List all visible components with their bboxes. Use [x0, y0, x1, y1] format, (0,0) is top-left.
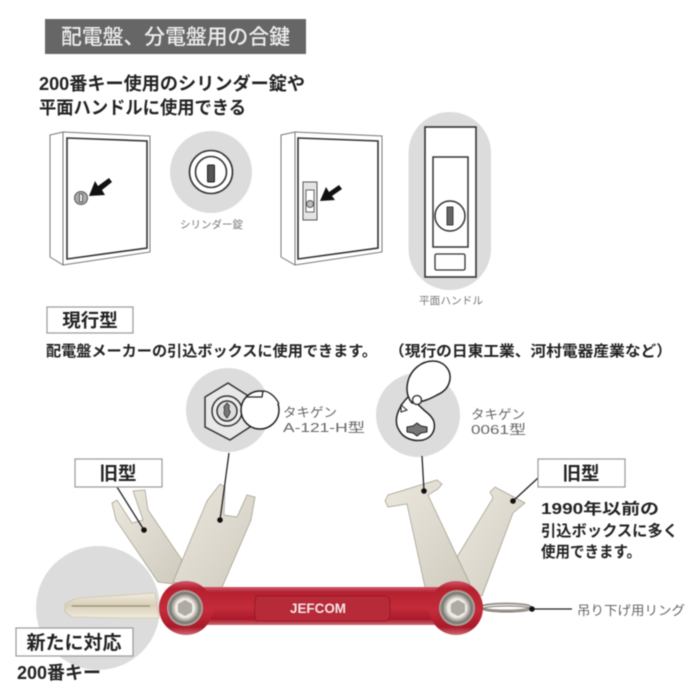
leader lines and dots	[117, 453, 572, 612]
text: usage for current type: 配電盤メーカーの引込ボックスに使用できます。	[46, 342, 377, 360]
label: cylinder lock: シリンダー錠	[180, 218, 243, 231]
label: flat handle: 平面ハンドル	[419, 295, 483, 307]
label: 200 key: 200番キー	[17, 663, 101, 683]
200 key	[65, 593, 159, 618]
heading: usable locks	[39, 73, 305, 118]
illustration: cabinet with flat handle	[281, 132, 382, 265]
tag: old type right	[538, 459, 625, 487]
text: usage for current type	[46, 342, 672, 360]
tag: old type right: 旧型	[562, 463, 600, 484]
text: old type description: 使用できます。	[541, 543, 641, 561]
label: Takigen A-121-H: タキゲン	[283, 405, 337, 420]
tool blade: A-121-H	[173, 484, 255, 592]
text: usage for current type: （現行の日東工業、河村電器産業など）	[389, 342, 672, 360]
icon: A-121-H lock	[186, 368, 279, 452]
red aluminium handle	[159, 581, 483, 635]
tag: current type	[47, 307, 133, 333]
tool blade: old type left	[112, 490, 182, 584]
text: old type description	[541, 499, 678, 561]
illustration: cabinet with cylinder lock	[50, 132, 150, 265]
tag: newly supported: 新たに対応	[26, 632, 122, 654]
tool blade: old type right	[457, 487, 525, 596]
tool blade: 0061	[385, 480, 470, 592]
brand name: JEFCOM	[290, 600, 346, 616]
label: Takigen 0061: タキゲン	[471, 407, 525, 422]
tag: current type: 現行型	[62, 310, 118, 331]
heading: usable locks: 200番キー使用のシリンダー錠や	[39, 73, 305, 94]
title banner: 配電盤、分電盤用の合鍵	[61, 26, 290, 49]
icon: cylinder lock	[170, 131, 252, 213]
tag: old type left: 旧型	[99, 463, 137, 484]
tag: newly supported	[16, 628, 133, 656]
label: Takigen 0061: 0061型	[471, 422, 526, 437]
icon: flat handle	[408, 112, 491, 290]
heading: usable locks: 平面ハンドルに使用できる	[39, 98, 246, 118]
label: Takigen A-121-H	[283, 405, 365, 435]
tag: old type left	[75, 459, 162, 487]
hanging ring	[481, 604, 531, 612]
left bolt	[167, 590, 203, 626]
grey circle behind key	[36, 546, 160, 670]
label: Takigen A-121-H: A-121-H型	[283, 420, 365, 435]
right bolt	[439, 590, 475, 626]
icon: 0061 lock	[376, 361, 460, 457]
text: old type description: 引込ボックスに多く	[541, 522, 678, 540]
text: old type description: 1990年以前の	[541, 499, 659, 518]
title banner	[45, 19, 306, 54]
label: hanging ring: 吊り下げ用リング	[577, 603, 685, 618]
label: Takigen 0061	[471, 407, 526, 437]
